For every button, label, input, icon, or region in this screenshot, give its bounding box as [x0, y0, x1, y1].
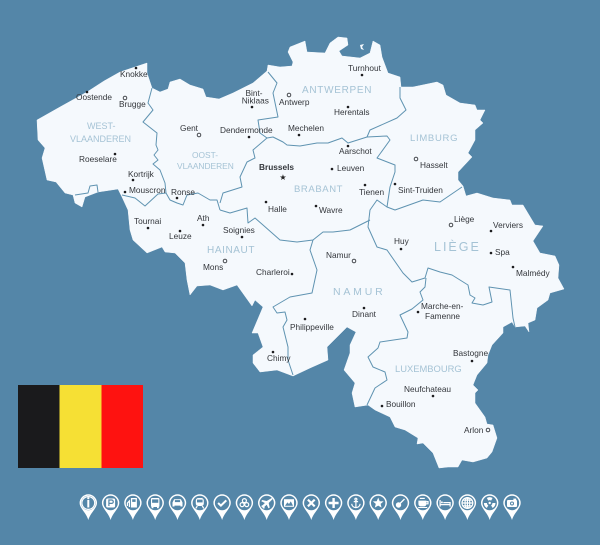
city: Wavre: Wavre — [319, 205, 343, 215]
pin: guitar — [392, 494, 409, 520]
city: Antwerp: Antwerp — [279, 97, 310, 107]
pin: car — [169, 494, 186, 520]
city: Malmédy: Malmédy — [516, 268, 551, 278]
pin: radiation — [481, 494, 498, 520]
region: Oost-Vlaanderen: VLAANDEREN — [177, 161, 234, 171]
city: Roeselare: Roeselare — [79, 154, 117, 164]
city: Leuze: Leuze — [169, 231, 192, 241]
city: Dendermonde: Dendermonde — [220, 125, 273, 135]
city: Bint-Niklaas — [242, 88, 269, 108]
city: Namur: Namur — [326, 250, 351, 260]
region: Namur: NAMUR — [333, 286, 386, 298]
city: Bastogne: Bastogne — [453, 348, 488, 358]
pin: camera — [503, 494, 521, 520]
city: Ath: Ath — [197, 213, 210, 223]
province borders — [75, 72, 515, 405]
region: Hainaut: HAINAUT — [207, 245, 255, 256]
pin: coffee cup — [414, 494, 432, 520]
city: Turnhout: Turnhout — [348, 63, 382, 73]
city: Hasselt — [414, 157, 448, 170]
region: Limburg: LIMBURG — [410, 133, 458, 144]
region: West-Vlaanderen: WEST- — [87, 121, 116, 131]
city: Gent: Gent — [180, 123, 199, 133]
city: Kortrijk: Kortrijk — [128, 169, 155, 179]
city: Bint-Niklaas: Bint- — [246, 88, 263, 98]
city: Mons: Mons — [203, 262, 223, 272]
map of Belgium — [37, 37, 564, 468]
city: Gent — [180, 123, 201, 137]
pin: airplane — [258, 494, 275, 520]
city: Soignies: Soignies — [223, 225, 255, 235]
pin: star — [370, 494, 387, 520]
city: Herentals: Herentals — [334, 107, 370, 117]
region: Oost-Vlaanderen: OOST- — [192, 150, 218, 160]
pin: fuel — [124, 494, 142, 520]
city: Halle — [265, 201, 287, 214]
city: Philippeville: Philippeville — [290, 322, 334, 332]
city: Liège: Liège — [454, 214, 475, 224]
city: Huy: Huy — [394, 236, 410, 246]
city: Charleroi: Charleroi — [256, 267, 290, 277]
city: Chimy: Chimy — [267, 353, 291, 363]
city: Marche-en-Famenne: Marche-en- — [421, 301, 464, 311]
city: Liège — [449, 214, 475, 227]
pin: photo gallery — [280, 494, 298, 520]
city: Marche-en-Famenne — [417, 301, 464, 321]
city: Neufchateau: Neufchateau — [404, 384, 451, 394]
pin: plus — [325, 494, 342, 520]
capital: Brussels: ★ — [279, 173, 287, 182]
region: Brabant: BRABANT — [294, 184, 343, 195]
city: Mons — [203, 259, 227, 272]
city: Bouillon: Bouillon — [386, 399, 416, 409]
pin: biohazard — [236, 494, 253, 520]
city: Bint-Niklaas: Niklaas — [242, 96, 269, 106]
city: Mouscron: Mouscron — [129, 185, 166, 195]
city: Spa: Spa — [495, 247, 510, 257]
city: Tournai: Tournai — [134, 216, 161, 226]
flag of Belgium — [18, 385, 143, 468]
region: Liège: LIÈGE — [434, 239, 481, 254]
city: Mechelen: Mechelen — [288, 123, 324, 133]
city: Halle: Halle — [268, 204, 287, 214]
pin: check — [213, 494, 231, 520]
city: Leuven: Leuven — [337, 163, 365, 173]
pin: info — [80, 494, 97, 520]
pin: close — [303, 494, 320, 520]
city: Hasselt: Hasselt — [420, 160, 448, 170]
country outline — [37, 37, 564, 468]
city: Arlon: Arlon — [464, 425, 484, 435]
city: Knokke: Knokke — [120, 69, 148, 79]
city: Ronse: Ronse — [171, 187, 195, 197]
region: Luxembourg: LUXEMBOURG — [395, 363, 462, 374]
pin: bus — [146, 494, 164, 520]
enclave speck — [360, 44, 364, 50]
city: Dinant: Dinant — [352, 309, 377, 319]
pin: bed — [436, 494, 454, 520]
city: Huy — [394, 236, 410, 250]
city: Aarschot: Aarschot — [339, 146, 372, 156]
pin: train — [191, 494, 208, 520]
pin: anchor — [347, 494, 365, 520]
icon row: map pins — [80, 494, 521, 520]
capital: Brussels: Brussels — [259, 162, 294, 172]
city: Namur — [326, 250, 356, 263]
city: Verviers: Verviers — [493, 220, 523, 230]
city: Philippeville — [290, 318, 334, 332]
pin: globe — [459, 494, 476, 520]
city: Brugge: Brugge — [119, 99, 146, 109]
region: Antwerpen: ANTWERPEN — [302, 85, 372, 96]
region: West-Vlaanderen: VLAANDEREN — [70, 134, 131, 144]
city: Marche-en-Famenne: Famenne — [425, 311, 460, 321]
city: Sint-Truiden: Sint-Truiden — [398, 185, 443, 195]
city: Oostende: Oostende — [76, 92, 112, 102]
pin: parking — [102, 494, 119, 520]
city: Tienen: Tienen — [359, 187, 384, 197]
capital: Brussels — [259, 162, 294, 182]
city: Bastogne — [453, 348, 488, 362]
